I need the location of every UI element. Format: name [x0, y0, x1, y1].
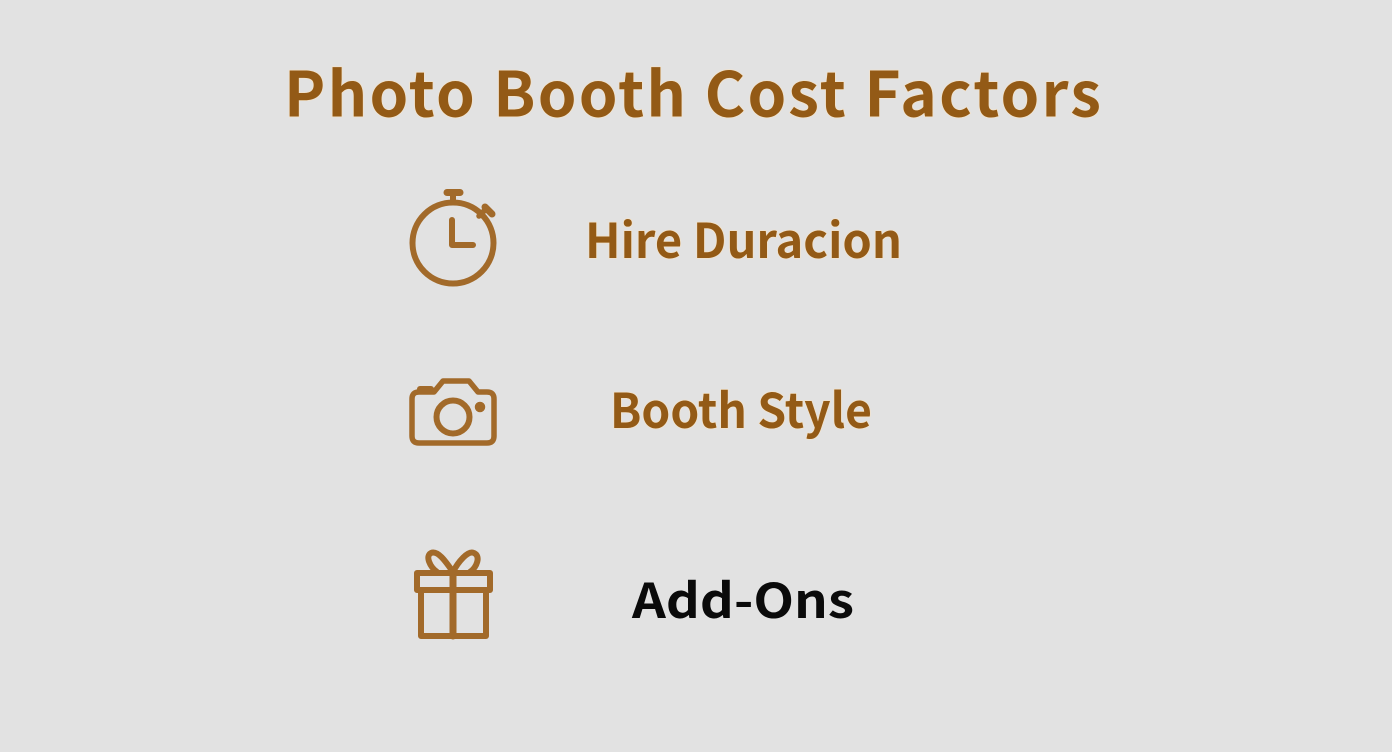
icon: camera	[412, 381, 494, 443]
row: add-ons	[417, 553, 854, 636]
row: hire duration	[412, 192, 902, 284]
row: booth style	[412, 372, 872, 443]
title: Photo Booth Cost Factors	[284, 44, 1101, 134]
label: add-ons: Add-Ons	[631, 562, 854, 632]
label: booth style: Booth Style	[610, 372, 872, 442]
icon: gift box	[417, 553, 490, 636]
label: hire duracion: Hire Duracion	[585, 202, 902, 272]
icon: stopwatch	[412, 192, 494, 284]
